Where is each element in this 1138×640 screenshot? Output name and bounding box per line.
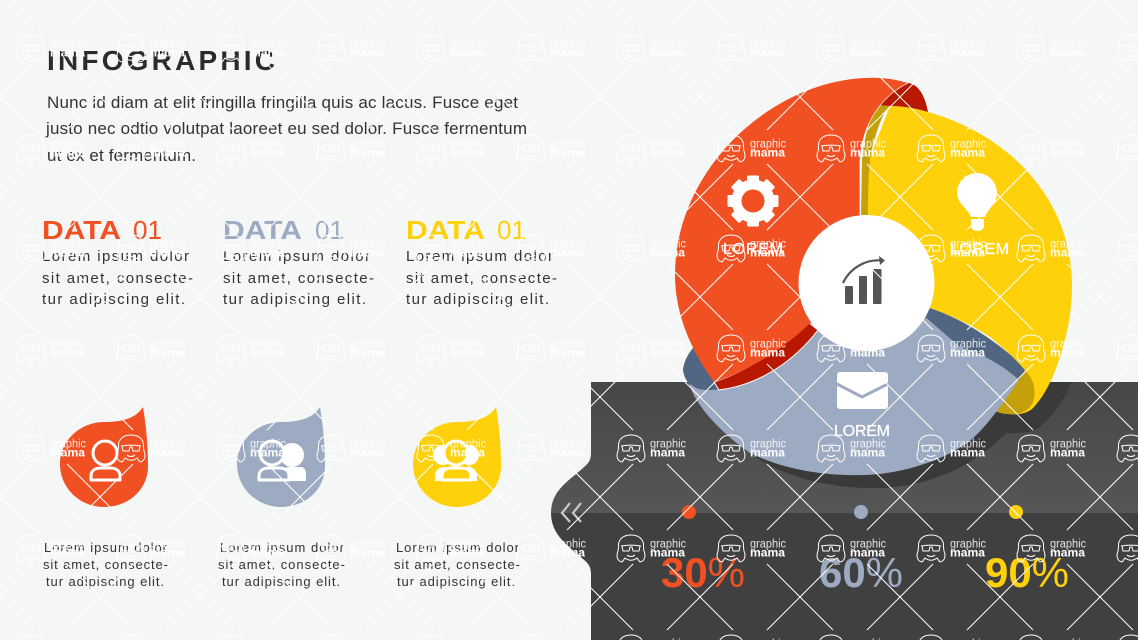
data column 1: tur adipiscing elit. — [42, 291, 185, 308]
intro paragraph — [45, 93, 527, 165]
legend dot: orange — [682, 505, 696, 519]
icon: chart growth — [843, 256, 885, 304]
data column 1: DATA — [42, 215, 121, 245]
caption 2 — [218, 540, 345, 589]
caption 3: Lorem ipsum dolor — [396, 540, 520, 555]
pie drop shadow — [740, 382, 1071, 488]
blue segment dark fold left — [683, 343, 722, 390]
red fold at bottom — [714, 322, 818, 390]
icon: gear — [728, 176, 778, 226]
data column 2: tur adipiscing elit. — [223, 291, 366, 308]
data column 2: 01 — [315, 215, 344, 245]
blue segment dark fold right — [925, 308, 1025, 380]
data column 1: 01 — [133, 215, 162, 245]
data column 3: 01 — [497, 215, 526, 245]
center circle — [798, 215, 934, 351]
caption 1: sit amet, consecte- — [43, 557, 168, 572]
stat: 90%: 90% — [985, 549, 1069, 596]
yellow segment dark fold — [861, 105, 890, 215]
data column 3: tur adipiscing elit. — [406, 291, 549, 308]
data column 2: DATA — [223, 215, 302, 245]
label: orange LOREM: LOREM — [723, 241, 783, 258]
legend dot: yellow — [1009, 505, 1023, 519]
data column 3 — [406, 215, 557, 308]
data column 3: sit amet, consecte- — [406, 270, 557, 287]
label: blue LOREM: LOREM — [834, 423, 890, 440]
data column 3: Lorem ipsum dolor — [406, 248, 553, 265]
icon: light bulb — [957, 173, 997, 231]
icon: blue drop with two people — [237, 407, 325, 507]
data column 3: DATA — [406, 215, 485, 245]
data column 2: Lorem ipsum dolor — [223, 248, 370, 265]
caption 3 — [394, 540, 520, 589]
icon: yellow drop with three people — [413, 407, 501, 507]
red fold at top — [877, 83, 928, 112]
title: INFOGRAPHIC — [47, 45, 275, 76]
panel: dark results panel — [551, 382, 1138, 640]
intro paragraph: justo nec odtio volutpat laoreet eu sed dolor. Fusce fermentum — [45, 119, 527, 138]
label: yellow LOREM: LOREM — [950, 241, 1009, 258]
caption 1: Lorem ipsum dolor — [44, 540, 168, 555]
orange segment highlight edge — [860, 83, 908, 215]
stat: 60%: 60% — [819, 549, 903, 596]
intro paragraph: Nunc id diam at elit fringilla fringilla quis ac lacus. Fusce eget — [47, 93, 518, 112]
legend dot: blue — [854, 505, 868, 519]
caption 1 — [43, 540, 168, 589]
icon: orange drop with single person — [60, 407, 148, 507]
caption 3: sit amet, consecte- — [394, 557, 520, 572]
data column 2: sit amet, consecte- — [223, 270, 374, 287]
caption 2: sit amet, consecte- — [218, 557, 345, 572]
chart: ribbon pie — [675, 78, 1072, 488]
data column 2 — [223, 215, 374, 308]
icon: double chevron — [562, 503, 581, 522]
caption 2: Lorem ipsum dolor — [220, 540, 345, 555]
data column 1 — [42, 215, 193, 308]
yellow segment — [866, 106, 1072, 387]
caption 1: tur adipiscing elit. — [46, 574, 164, 589]
icon: envelope — [835, 372, 890, 409]
caption 3: tur adipiscing elit. — [397, 574, 515, 589]
stat: 30%: 30% — [661, 549, 745, 596]
data column 1: Lorem ipsum dolor — [42, 248, 189, 265]
caption 2: tur adipiscing elit. — [222, 574, 340, 589]
orange segment — [675, 78, 908, 382]
intro paragraph: ut ex et fermentum. — [47, 146, 196, 165]
blue segment — [689, 308, 1019, 475]
yellow gold curl — [993, 345, 1059, 414]
data column 1: sit amet, consecte- — [42, 270, 193, 287]
